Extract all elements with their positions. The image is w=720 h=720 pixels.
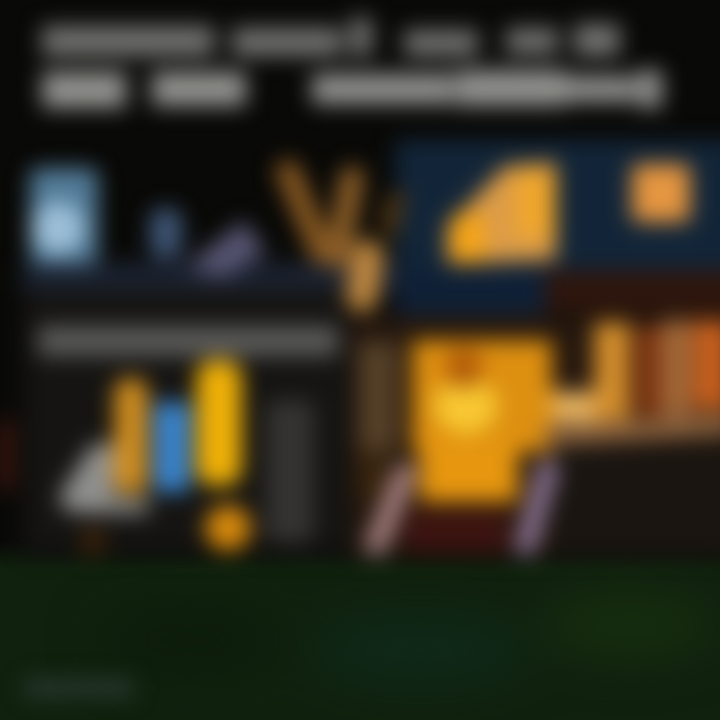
porch: glowing entrance [412,340,552,502]
panel: hedge foreground shading [100,597,720,680]
panel: house facade [22,140,720,555]
edge: left red glow [0,420,12,490]
heading mark: amber V and S letters [288,172,398,296]
grey bar [58,444,154,514]
icon: blue window left [30,168,98,264]
door: dark red step [404,510,508,552]
text: illegible caption bottom left [24,680,134,696]
subheading: illegible grey text bar [38,326,338,356]
blue bar [154,402,190,492]
porch: pink steps rails [376,470,548,545]
dim brown bar [82,528,104,554]
window: small lit orange window [632,164,690,222]
icon: dim blue shapes [150,208,266,278]
porch: railing glow [545,414,720,446]
dark grey bar [266,400,314,542]
porch: brown column left [358,342,398,500]
amber dot [205,505,251,551]
orange bar [114,378,148,494]
window: large lit amber window [446,162,556,264]
bar chart: coloured vertical bars [58,360,314,554]
yellow bar [196,360,242,486]
porch: right lit windows [552,320,720,422]
title: illegible blurred heading line 2 [42,70,662,108]
title: illegible blurred heading line 1 [42,18,620,56]
